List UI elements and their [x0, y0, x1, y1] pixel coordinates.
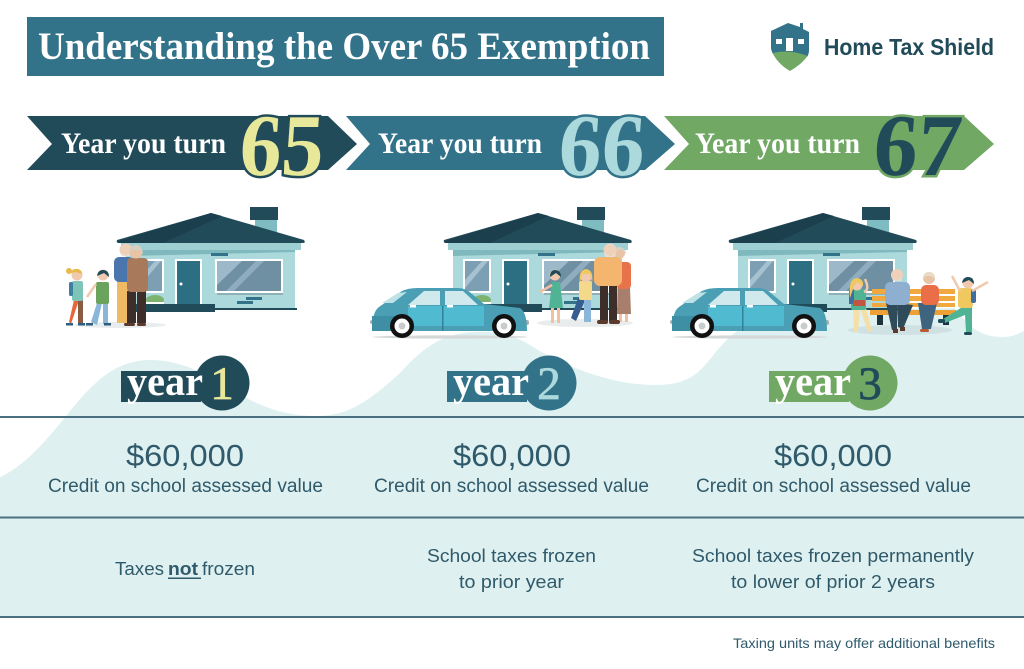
freeze note: year 1: [115, 558, 255, 579]
badge: year 1: 1: [210, 358, 234, 410]
grandmother: [613, 247, 631, 322]
girl with book: [849, 278, 872, 332]
freeze note: year 3: School taxes frozen permanently: [692, 545, 975, 566]
arrow banner: year you turn 66: Year you turn: [378, 127, 542, 160]
credit text: year 1: [48, 438, 323, 497]
credit text: year 3: Credit on school assessed value: [696, 476, 971, 497]
credit text: year 3: [696, 438, 971, 497]
logo: Home Tax Shield: Home Tax Shield: [824, 34, 994, 60]
house: [729, 207, 917, 312]
badge: year 3: year: [775, 358, 851, 404]
badge: year 3: [769, 356, 898, 410]
credit text: year 1: Credit on school assessed value: [48, 476, 323, 497]
badge: year 1: [121, 356, 250, 410]
freeze note: year 2: to prior year: [459, 571, 564, 592]
freeze note: year 3: to lower of prior 2 years: [731, 571, 935, 592]
grandmother: [124, 245, 148, 326]
grandfather: [594, 244, 622, 324]
freeze note: year 1: Taxes: [115, 558, 164, 579]
badge: year 3: 3: [858, 358, 882, 410]
credit text: year 1: $60,000: [126, 438, 244, 473]
illustration: year 1 house and family: [66, 207, 305, 328]
badge: year 2: [447, 356, 576, 410]
arrow banner: year you turn 66: [346, 97, 675, 195]
arrow banner: year you turn 67: 67: [871, 97, 965, 195]
freeze note: year 1: frozen: [202, 558, 255, 579]
illustration: year 3 house, car, bench and family: [670, 207, 988, 339]
badge: year 1: year: [127, 358, 203, 404]
credit text: year 2: [374, 438, 649, 497]
footnote: Taxing units may offer additional benefits: [733, 635, 995, 651]
house: [117, 207, 305, 312]
seated grandmother: [918, 272, 939, 332]
icon: house shield: [771, 23, 809, 71]
girl with dark hair: [86, 270, 111, 326]
bench: [870, 289, 956, 325]
arrow banner: year you turn 67: [664, 97, 994, 195]
car: [670, 288, 829, 339]
grandfather: [114, 244, 134, 323]
badge: year 2: year: [453, 358, 529, 404]
arrow banner: year you turn 65: 65: [237, 97, 327, 195]
title banner: Understanding the Over 65 Exemption: [38, 25, 650, 68]
badge: year 2: 2: [537, 358, 561, 410]
cheering kid: [938, 276, 988, 335]
freeze note: year 3: [692, 545, 975, 592]
freeze note: year 2: School taxes frozen: [427, 545, 596, 566]
arrow banner: year you turn 67: Year you turn: [695, 127, 860, 160]
illustration: year 2 house, car and family: [370, 207, 633, 339]
arrow banner: year you turn 66: 66: [556, 97, 648, 195]
arrow banner: year you turn 65: Year you turn: [61, 127, 226, 160]
girl with ponytail: [66, 268, 85, 326]
credit text: year 2: Credit on school assessed value: [374, 476, 649, 497]
background wave: [0, 308, 1024, 617]
girl with blonde hair: [571, 269, 592, 322]
credit text: year 2: $60,000: [453, 438, 571, 473]
arrow banner: year you turn 65: [27, 97, 357, 195]
girl in green dress: [540, 270, 563, 323]
car: [370, 288, 529, 339]
freeze note: year 1: not: [168, 558, 198, 579]
freeze note: year 2: [427, 545, 596, 592]
seated grandfather: [885, 269, 913, 333]
logo: Home Tax Shield: [771, 23, 994, 71]
house: [444, 207, 632, 312]
credit text: year 3: $60,000: [774, 438, 892, 473]
